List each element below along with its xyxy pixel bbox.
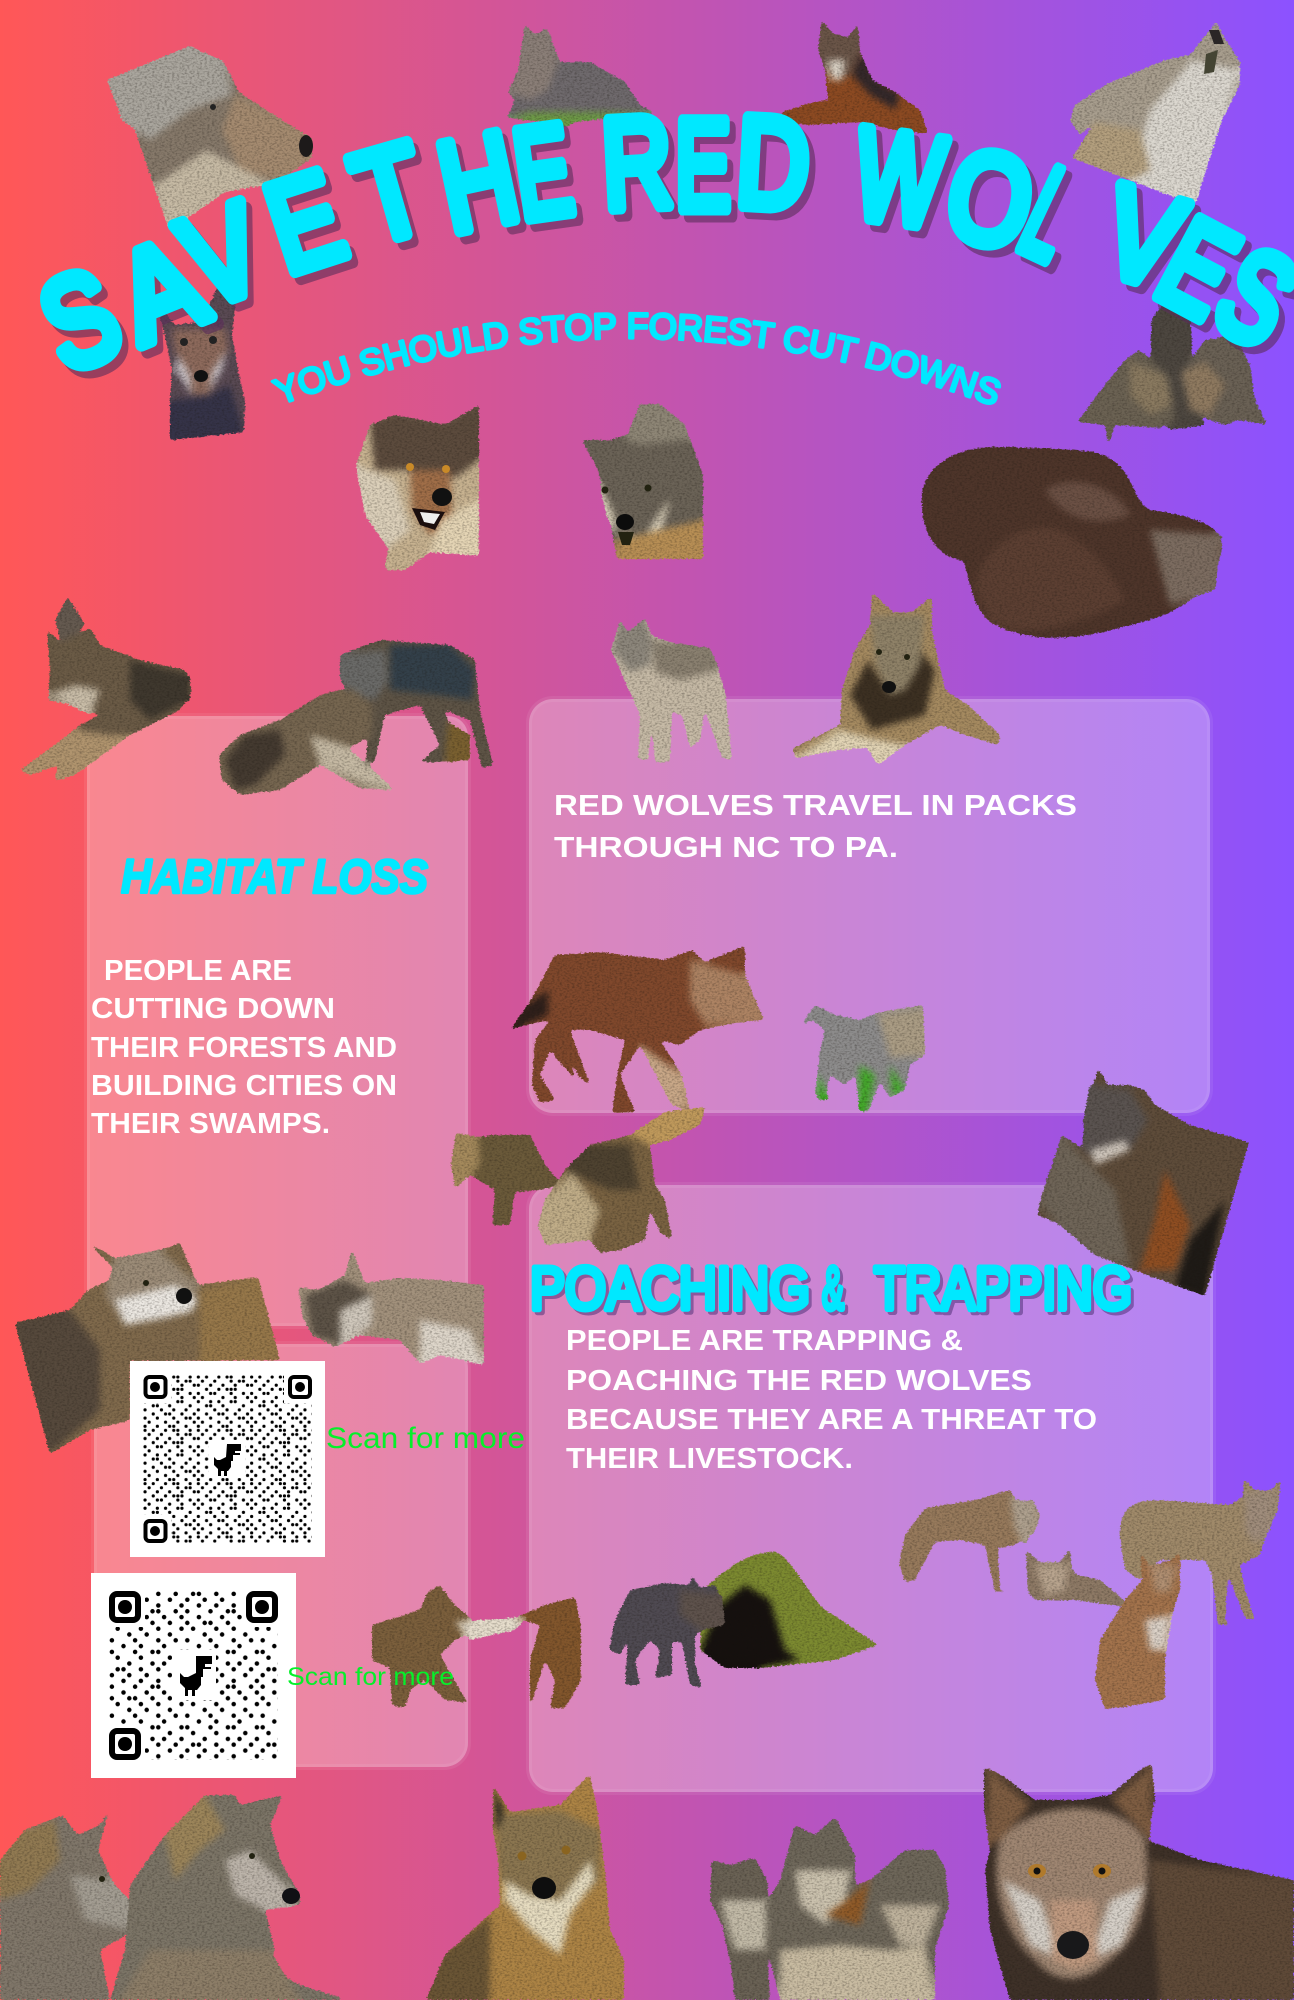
wolf: big face right	[984, 1764, 1294, 2000]
text: packs paragraph: RED WOLVES TRAVEL IN PACKS	[554, 790, 1077, 822]
title: SAVE THE RED WOLVES: T	[338, 115, 442, 271]
text: habitat loss paragraph: PEOPLE ARE	[104, 955, 292, 987]
title: SAVE THE RED WOLVES: E	[250, 143, 360, 301]
text: packs paragraph: THROUGH NC TO PA.	[554, 832, 898, 864]
title: SAVE THE RED WOLVES: L	[1002, 140, 1098, 287]
coyote: standing left	[899, 1490, 1040, 1592]
panel: packs	[529, 699, 1210, 1113]
title: SAVE THE RED WOLVES: E	[505, 97, 580, 246]
title: SAVE THE RED WOLVES	[21, 90, 1294, 399]
text: poaching paragraph: PEOPLE ARE TRAPPING &	[566, 1325, 963, 1357]
wolf: dark by den	[609, 1575, 725, 1688]
heading: habitat loss: HABITAT LOSS	[121, 851, 428, 904]
wolf: bottom left grey	[0, 1808, 156, 2000]
wolf: bottom second grey	[110, 1795, 348, 2000]
title: SAVE THE RED WOLVES: V	[164, 176, 281, 335]
wolves: standing and lying pair	[219, 640, 493, 795]
title: SAVE THE RED WOLVES: E	[1137, 190, 1259, 346]
wolf: bottom center golden	[426, 1774, 624, 2000]
title: SAVE THE RED WOLVES: O	[935, 120, 1045, 277]
title: SAVE THE RED WOLVES: E	[675, 93, 731, 236]
text: habitat loss paragraph	[91, 955, 397, 1140]
heading: poaching and trapping: TRAPPING	[874, 1255, 1132, 1322]
text: habitat loss paragraph: CUTTING DOWN	[91, 993, 335, 1025]
coyote: sitting	[1095, 1552, 1180, 1709]
wolf: snarling face	[356, 405, 479, 570]
text: habitat loss paragraph: THEIR SWAMPS.	[91, 1108, 330, 1140]
QR code: upper	[130, 1361, 325, 1557]
text: habitat loss paragraph: BUILDING CITIES ON	[91, 1070, 397, 1102]
wolves: tilted pair	[1038, 1068, 1249, 1296]
text: poaching paragraph: THEIR LIVESTOCK.	[566, 1443, 853, 1475]
title: SAVE THE RED WOLVES: S	[21, 240, 138, 399]
wolf: small walking	[451, 1133, 562, 1225]
text: poaching paragraph: BECAUSE THEY ARE A THREAT TO	[566, 1404, 1097, 1436]
coyote: standing right	[1120, 1478, 1281, 1625]
subtitle: you should stop forest cut downs: YOU SHOULD STOP FOREST CUT DOWNS	[270, 312, 1002, 405]
wolf: standing pale grey	[611, 618, 732, 762]
wolf: grey pup in grass	[801, 1005, 925, 1112]
title: SAVE THE RED WOLVES: V	[1088, 158, 1198, 316]
label: scan for more lower: Scan for more	[287, 1663, 454, 1691]
text: packs paragraph	[554, 790, 1077, 864]
text: poaching paragraph	[566, 1325, 1097, 1475]
panel: poaching and trapping	[529, 1185, 1213, 1792]
title: SAVE THE RED WOLVES: W	[846, 101, 952, 255]
wolves: pack of three	[710, 1817, 949, 2000]
title: SAVE THE RED WOLVES: H	[427, 104, 529, 260]
label: scan for more upper: Scan for more	[326, 1422, 525, 1455]
panel: habitat loss upper	[87, 716, 468, 1326]
panel: habitat loss lower	[94, 1344, 468, 1767]
wolf: tail up, head low	[538, 1107, 705, 1253]
wolf: brown pups	[922, 447, 1222, 638]
wolf: three pups	[1077, 302, 1267, 446]
wolf: red wolf walking	[510, 946, 764, 1113]
heading: poaching and trapping: &	[822, 1255, 844, 1322]
QR code: lower	[91, 1573, 296, 1778]
wolves: snowy pair	[15, 1242, 280, 1454]
heading: poaching and trapping	[530, 1255, 1132, 1322]
text: habitat loss paragraph: THEIR FORESTS AND	[91, 1032, 397, 1064]
wolf: sleeping	[298, 1249, 484, 1365]
title: SAVE THE RED WOLVES: A	[98, 209, 222, 371]
coyote: lying middle	[1026, 1548, 1124, 1607]
text: poaching paragraph: POACHING THE RED WOLVES	[566, 1365, 1032, 1397]
wolf: lying facing front	[793, 592, 1000, 765]
wolf: pup on grass	[507, 24, 655, 132]
title: SAVE THE RED WOLVES: D	[733, 90, 813, 237]
wolf: grey front face	[582, 404, 703, 559]
title: SAVE THE RED WOLVES: R	[599, 90, 675, 236]
wolves: tug of war	[372, 1585, 581, 1708]
wolf: snowy profile head	[107, 46, 313, 230]
wolf: howling	[1070, 22, 1240, 205]
moss den	[700, 1552, 878, 1668]
wolf: dark red-grey wolf facing front	[157, 272, 245, 440]
wolf: red wolf lying	[782, 20, 928, 134]
heading: poaching and trapping: POACHING	[530, 1255, 810, 1322]
wolf: lying with pup on head	[20, 597, 192, 781]
